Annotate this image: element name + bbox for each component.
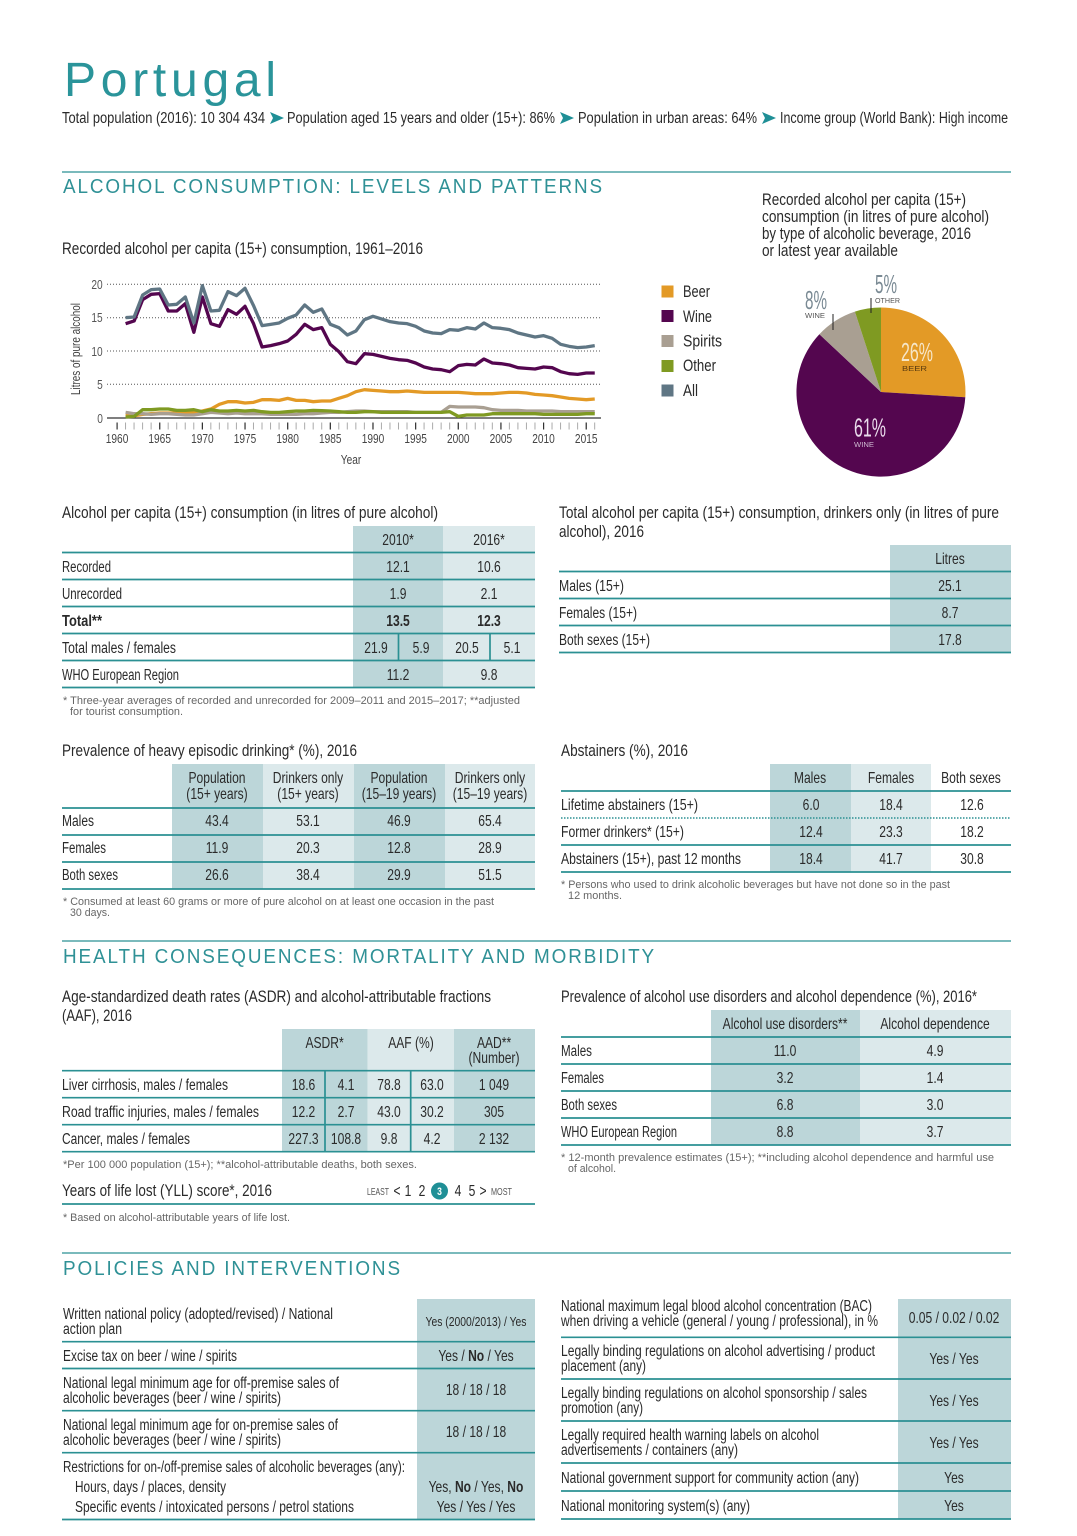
- x axis labels: 1975: [234, 432, 256, 446]
- table: alcohol use disorders: 3.0: [927, 1096, 944, 1113]
- footnote: *Per 100 000 population (15+); **alcohol-attributable deaths, both sexes.: [63, 1159, 417, 1171]
- section heading: policies: POLICIES AND INTERVENTIONS: [63, 1258, 402, 1280]
- line series: beer: [126, 390, 595, 416]
- table: abstainers: Males: [794, 769, 826, 786]
- table: policies left: National legal minimum age for on-premise sales of: [63, 1417, 339, 1434]
- score scale: 4: [455, 1182, 462, 1199]
- table: alcohol per capita consumption: 5.9: [413, 639, 430, 656]
- pie slice: wine 61%: [796, 334, 965, 477]
- table: policies left: [62, 1299, 535, 1520]
- table: alcohol use disorders: 3.7: [927, 1123, 944, 1140]
- table: alcohol per capita consumption: 21.9: [364, 639, 388, 656]
- table: death rates and attributable fractions: [62, 988, 535, 1171]
- table: alcohol use disorders: 8.8: [777, 1123, 794, 1140]
- table: death rates and attributable fractions: AAF (%): [388, 1034, 434, 1051]
- line series: other: [126, 409, 595, 417]
- table: heavy episodic drinking: 28.9: [478, 839, 502, 856]
- pie label: spirits 8%: WINE: [805, 311, 825, 320]
- table: alcohol use disorders: Females: [561, 1070, 604, 1087]
- score scale: 3: [437, 1186, 442, 1198]
- line chart panel: recorded consumption 1961-2016: [62, 240, 601, 467]
- table: alcohol per capita consumption: 13.5: [386, 612, 410, 629]
- table: policies left: 18 / 18 / 18: [446, 1381, 506, 1398]
- table: alcohol per capita consumption: 9.8: [481, 666, 498, 683]
- table: policies left: Hours, days / places, density: [75, 1479, 226, 1496]
- legend: Beer: [683, 283, 710, 301]
- table: drinkers only consumption: Females (15+): [559, 605, 637, 622]
- footnote: of alcohol.: [568, 1163, 616, 1175]
- table: heavy episodic drinking: 43.4: [205, 812, 229, 829]
- table: heavy episodic drinking: (15–19 years): [453, 785, 527, 802]
- score scale: 2: [419, 1182, 426, 1199]
- table: abstainers: Lifetime abstainers (15+): [561, 797, 698, 814]
- table: policies right: Yes: [944, 1497, 964, 1514]
- table heading: alcohol), 2016: [559, 523, 644, 541]
- country summary line: [62, 110, 1008, 127]
- table: policies left: action plan: [63, 1321, 122, 1338]
- table: policies right: National monitoring system(s) (any): [561, 1498, 750, 1515]
- pie heading: or latest year available: [762, 242, 898, 260]
- footnote: for tourist consumption.: [70, 706, 183, 718]
- table: heavy episodic drinking: 11.9: [206, 839, 229, 856]
- x axis labels: 2010: [532, 432, 555, 446]
- table: death rates and attributable fractions: 12.2: [292, 1103, 316, 1120]
- y axis labels: 0: [97, 412, 103, 426]
- table: policies left: Specific events / intoxicated persons / petrol stations: [75, 1499, 354, 1516]
- table: policies left: National legal minimum age for off-premise sales of: [63, 1375, 340, 1392]
- score scale: >: [479, 1182, 487, 1199]
- table: abstainers: 41.7: [879, 850, 903, 867]
- footnote: * Three-year averages of recorded and unrecorded for 2009–2011 and 2015–2017; **adjusted: [63, 695, 520, 707]
- table heading: [62, 988, 491, 1025]
- table: heavy episodic drinking: Drinkers only: [273, 769, 343, 786]
- country summary line: Population aged 15 years and older (15+): 86%: [287, 110, 555, 127]
- table heading: [559, 504, 999, 541]
- legend: [662, 283, 722, 400]
- x axis labels: 1960: [106, 432, 129, 446]
- table heading: Prevalence of alcohol use disorders and alcohol dependence (%), 2016*: [561, 988, 977, 1006]
- table: policies left: Yes / No / Yes: [438, 1347, 514, 1364]
- line series: all: [126, 286, 595, 348]
- table: drinkers only consumption: 25.1: [938, 577, 962, 594]
- table: death rates and attributable fractions: 4.1: [338, 1076, 355, 1093]
- table: heavy episodic drinking: Females: [62, 840, 106, 857]
- table heading: (AAF), 2016: [62, 1007, 132, 1025]
- legend: Wine: [683, 308, 712, 326]
- table: abstainers: 18.4: [799, 850, 823, 867]
- table: alcohol per capita consumption: Total males / females: [62, 640, 176, 657]
- table: heavy episodic drinking: (15+ years): [186, 785, 248, 802]
- legend: Other: [683, 357, 716, 375]
- table: abstainers: 18.2: [960, 823, 984, 840]
- table: death rates and attributable fractions: 2 132: [479, 1130, 509, 1147]
- x axis labels: 1970: [191, 432, 214, 446]
- table: death rates and attributable fractions: 78.8: [377, 1076, 401, 1093]
- x axis labels: 2000: [447, 432, 470, 446]
- y axis title: Litres of pure alcohol: [69, 303, 83, 395]
- pie label: other 5%: OTHER: [875, 296, 901, 305]
- pie heading: [762, 191, 989, 260]
- table: death rates and attributable fractions: Cancer, males / females: [62, 1131, 190, 1148]
- title: Portugal: [64, 54, 276, 107]
- y axis labels: [91, 278, 103, 426]
- table: alcohol per capita consumption: [62, 504, 535, 718]
- pie slice: spirits 8%: [819, 312, 881, 392]
- pie label: wine 61%: 61%: [854, 412, 886, 442]
- table: death rates and attributable fractions: Road traffic injuries, males / females: [62, 1104, 259, 1121]
- table: alcohol per capita consumption: 20.5: [455, 639, 479, 656]
- table: policies right: National government support for community action (any): [561, 1470, 859, 1487]
- table: heavy episodic drinking: 20.3: [296, 839, 320, 856]
- table: alcohol use disorders: 4.9: [927, 1042, 944, 1059]
- pie label: wine 61%: [854, 412, 886, 449]
- table: alcohol per capita consumption: 11.2: [387, 666, 410, 683]
- score scale: 5: [469, 1182, 476, 1199]
- pie label: beer: 26%: [901, 337, 933, 367]
- table: heavy episodic drinking: Population: [188, 769, 246, 786]
- table: drinkers only consumption: 17.8: [938, 631, 962, 648]
- table: heavy episodic drinking: 46.9: [387, 812, 411, 829]
- table: policies right: Yes / Yes: [929, 1350, 979, 1367]
- table: abstainers: Both sexes: [941, 769, 1001, 786]
- score heading: Years of life lost (YLL) score*, 2016: [62, 1181, 272, 1200]
- table: alcohol use disorders: 11.0: [774, 1042, 797, 1059]
- table: abstainers: 23.3: [879, 823, 903, 840]
- table: heavy episodic drinking: Both sexes: [62, 867, 118, 884]
- table: policies right: National maximum legal blood alcohol concentration (BAC): [561, 1298, 872, 1315]
- footnote: * Based on alcohol-attributable years of life lost.: [63, 1212, 290, 1224]
- table: policies left: Excise tax on beer / wine / spirits: [63, 1348, 237, 1365]
- table: policies right: Yes / Yes: [929, 1392, 979, 1409]
- table: policies right: advertisements / containers (any): [561, 1442, 738, 1459]
- x axis labels: 1985: [319, 432, 342, 446]
- table: abstainers: Females: [868, 769, 914, 786]
- score scale: [367, 1182, 512, 1200]
- table: alcohol use disorders: 1.4: [927, 1069, 944, 1086]
- table: death rates and attributable fractions: 227.3: [288, 1130, 319, 1147]
- table: alcohol per capita consumption: WHO European Region: [62, 667, 179, 684]
- table heading: Prevalence of heavy episodic drinking* (%), 2016: [62, 742, 357, 760]
- table: heavy episodic drinking: (15+ years): [277, 785, 339, 802]
- section heading: alcohol consumption: ALCOHOL CONSUMPTION: LEVELS AND PATTERNS: [63, 176, 604, 198]
- table: policies left: Written national policy (adopted/revised) / National: [63, 1306, 333, 1323]
- table: abstainers: Former drinkers* (15+): [561, 824, 684, 841]
- pie heading: consumption (in litres of pure alcohol): [762, 208, 989, 226]
- footnote: [63, 695, 520, 718]
- footnote: [63, 896, 494, 919]
- pie label: beer: BEER: [902, 364, 928, 373]
- country summary line: Total population (2016): 10 304 434: [62, 110, 265, 127]
- footnote: [561, 1152, 994, 1175]
- table: alcohol use disorders: 3.2: [777, 1069, 794, 1086]
- table heading: Alcohol per capita (15+) consumption (in litres of pure alcohol): [62, 504, 438, 522]
- table: heavy episodic drinking: 65.4: [478, 812, 502, 829]
- footnote: [561, 879, 950, 902]
- x axis labels: 1995: [404, 432, 427, 446]
- table: death rates and attributable fractions: AAD**: [477, 1034, 512, 1051]
- pie heading: Recorded alcohol per capita (15+): [762, 191, 966, 209]
- table: death rates and attributable fractions: 1 049: [479, 1076, 509, 1093]
- table: drinkers only consumption: 8.7: [942, 604, 959, 621]
- pie label: beer: [901, 337, 933, 373]
- table: alcohol per capita consumption: 12.1: [386, 558, 410, 575]
- y axis labels: 10: [91, 345, 103, 359]
- table: death rates and attributable fractions: ASDR*: [305, 1034, 344, 1051]
- score scale: LEAST: [367, 1186, 389, 1198]
- section heading: health consequences: HEALTH CONSEQUENCES: MORTALITY AND MORBIDITY: [63, 946, 656, 968]
- footnote: 30 days.: [70, 907, 110, 919]
- footnote: * Consumed at least 60 grams or more of pure alcohol on at least one occasion in the past: [63, 896, 494, 908]
- table: abstainers: 12.4: [799, 823, 823, 840]
- table: policies right: Legally binding regulations on alcohol sponsorship / sales: [561, 1385, 867, 1402]
- x axis labels: 1990: [362, 432, 385, 446]
- table: policies left: Yes (2000/2013) / Yes: [426, 1314, 527, 1329]
- table: alcohol use disorders: Males: [561, 1043, 592, 1060]
- table: policies left: Yes, No / Yes, No: [429, 1478, 523, 1495]
- pie label: wine 61%: WINE: [854, 440, 874, 449]
- footnote: * 12-month prevalence estimates (15+); **including alcohol dependence and harmful use: [561, 1152, 994, 1164]
- table: abstainers: 6.0: [803, 796, 820, 813]
- x axis title: Year: [341, 453, 361, 467]
- table: drinkers only consumption: Litres: [935, 550, 965, 567]
- pie slice: other 5%: [855, 307, 881, 392]
- table: abstainers: Abstainers (15+), past 12 months: [561, 851, 741, 868]
- table: death rates and attributable fractions: 305: [484, 1103, 504, 1120]
- table: policies right: 0.05 / 0.02 / 0.02: [909, 1309, 1000, 1326]
- table: alcohol per capita consumption: 10.6: [477, 558, 501, 575]
- table: heavy episodic drinking: 29.9: [387, 866, 411, 883]
- table: heavy episodic drinking: [62, 742, 535, 919]
- table: policies right: Legally required health warning labels on alcohol: [561, 1427, 819, 1444]
- line series: wine: [126, 294, 595, 374]
- table: policies right: Yes: [944, 1469, 964, 1486]
- table: heavy episodic drinking: 26.6: [205, 866, 229, 883]
- table: heavy episodic drinking: (15–19 years): [362, 785, 436, 802]
- table: alcohol use disorders: 6.8: [777, 1096, 794, 1113]
- x axis labels: [106, 432, 597, 446]
- table: heavy episodic drinking: Drinkers only: [455, 769, 525, 786]
- table: abstainers: 12.6: [960, 796, 984, 813]
- table: heavy episodic drinking: 53.1: [296, 812, 320, 829]
- years of life lost score: [62, 1181, 535, 1224]
- y axis labels: 20: [91, 278, 103, 292]
- pie label: spirits 8%: 8%: [805, 285, 827, 315]
- table: alcohol use disorders: Both sexes: [561, 1097, 617, 1114]
- table heading: Age-standardized death rates (ASDR) and alcohol-attributable fractions: [62, 988, 491, 1006]
- table: alcohol use disorders: WHO European Region: [561, 1124, 677, 1141]
- pie label: other 5%: 5%: [875, 269, 897, 299]
- table: death rates and attributable fractions: (Number): [469, 1049, 519, 1066]
- table: alcohol per capita consumption: 2.1: [481, 585, 498, 602]
- x axis labels: 1980: [276, 432, 299, 446]
- table heading: Total alcohol per capita (15+) consumption, drinkers only (in litres of pure: [559, 504, 999, 522]
- table: heavy episodic drinking: Males: [62, 813, 94, 830]
- footnote: * Persons who used to drink alcoholic beverages but have not done so in the past: [561, 879, 950, 891]
- country summary line: Population in urban areas: 64%: [578, 110, 757, 127]
- table: policies left: 18 / 18 / 18: [446, 1423, 506, 1440]
- x axis labels: 2015: [575, 432, 597, 446]
- table: policies left: alcoholic beverages (beer / wine / spirits): [63, 1390, 281, 1407]
- table: policies right: when driving a vehicle (general / young / professional), in %: [560, 1313, 878, 1330]
- table: alcohol per capita consumption: 2010*: [382, 531, 414, 548]
- table: policies left: Restrictions for on-/off-premise sales of alcoholic beverages (any):: [63, 1459, 405, 1476]
- table: abstainers: 18.4: [879, 796, 903, 813]
- y axis labels: 5: [97, 378, 103, 392]
- table: death rates and attributable fractions: 4.2: [424, 1130, 441, 1147]
- legend: All: [683, 382, 698, 400]
- score scale: MOST: [491, 1186, 512, 1198]
- table: alcohol per capita consumption: Unrecorded: [62, 586, 122, 603]
- table: abstainers: 30.8: [960, 850, 984, 867]
- table: heavy episodic drinking: 51.5: [478, 866, 502, 883]
- pie label: other 5%: [871, 269, 901, 313]
- pie label: spirits 8%: [805, 285, 833, 330]
- table: alcohol per capita consumption: 12.3: [477, 612, 501, 629]
- table: death rates and attributable fractions: 18.6: [292, 1076, 316, 1093]
- x axis labels: 2005: [490, 432, 512, 446]
- x axis labels: 1965: [148, 432, 171, 446]
- table: death rates and attributable fractions: 43.0: [377, 1103, 401, 1120]
- table: policies right: [560, 1298, 1011, 1519]
- table: death rates and attributable fractions: Liver cirrhosis, males / females: [62, 1077, 228, 1094]
- table: death rates and attributable fractions: 2.7: [338, 1103, 355, 1120]
- line series: spirits: [126, 406, 595, 415]
- table: drinkers only consumption: Males (15+): [559, 578, 624, 595]
- table: abstainers: [561, 742, 1011, 902]
- table: alcohol per capita consumption: Total**: [62, 613, 103, 630]
- table: alcohol per capita consumption: 2016*: [473, 531, 505, 548]
- table: policies right: Yes / Yes: [929, 1434, 979, 1451]
- table: policies right: promotion (any): [561, 1400, 643, 1417]
- table: alcohol use disorders: Alcohol dependence: [880, 1015, 990, 1032]
- legend: Spirits: [683, 332, 722, 350]
- table: alcohol use disorders: Alcohol use disorders**: [723, 1015, 848, 1032]
- table: alcohol use disorders: [561, 988, 1011, 1175]
- chart heading: Recorded alcohol per capita (15+) consumption, 1961–2016: [62, 240, 423, 258]
- table: death rates and attributable fractions: 9.8: [381, 1130, 398, 1147]
- table: policies left: alcoholic beverages (beer / wine / spirits): [63, 1432, 281, 1449]
- table: drinkers only consumption: [559, 504, 1011, 652]
- pie heading: by type of alcoholic beverage, 2016: [762, 225, 971, 243]
- table: death rates and attributable fractions: 108.8: [331, 1130, 361, 1147]
- table: alcohol per capita consumption: 1.9: [390, 585, 407, 602]
- table: heavy episodic drinking: Population: [370, 769, 428, 786]
- table: death rates and attributable fractions: 30.2: [420, 1103, 444, 1120]
- table: policies right: placement (any): [561, 1358, 646, 1375]
- table: death rates and attributable fractions: 63.0: [420, 1076, 444, 1093]
- table: alcohol per capita consumption: Recorded: [62, 559, 111, 576]
- table: heavy episodic drinking: 12.8: [387, 839, 411, 856]
- pie chart panel: [762, 191, 989, 477]
- y axis labels: 15: [91, 311, 103, 325]
- footnote: 12 months.: [568, 890, 622, 902]
- table: heavy episodic drinking: 38.4: [296, 866, 320, 883]
- score scale: 1: [405, 1182, 412, 1199]
- table heading: Abstainers (%), 2016: [561, 742, 688, 760]
- table: policies right: Legally binding regulations on alcohol advertising / product: [561, 1343, 876, 1360]
- pie slice: beer 26%: [881, 308, 965, 397]
- country summary line: Income group (World Bank): High income: [780, 110, 1008, 127]
- table: alcohol per capita consumption: 5.1: [504, 639, 521, 656]
- table: policies left: Yes / Yes / Yes: [437, 1498, 515, 1515]
- score scale: <: [393, 1182, 401, 1199]
- table: drinkers only consumption: Both sexes (15+): [559, 632, 650, 649]
